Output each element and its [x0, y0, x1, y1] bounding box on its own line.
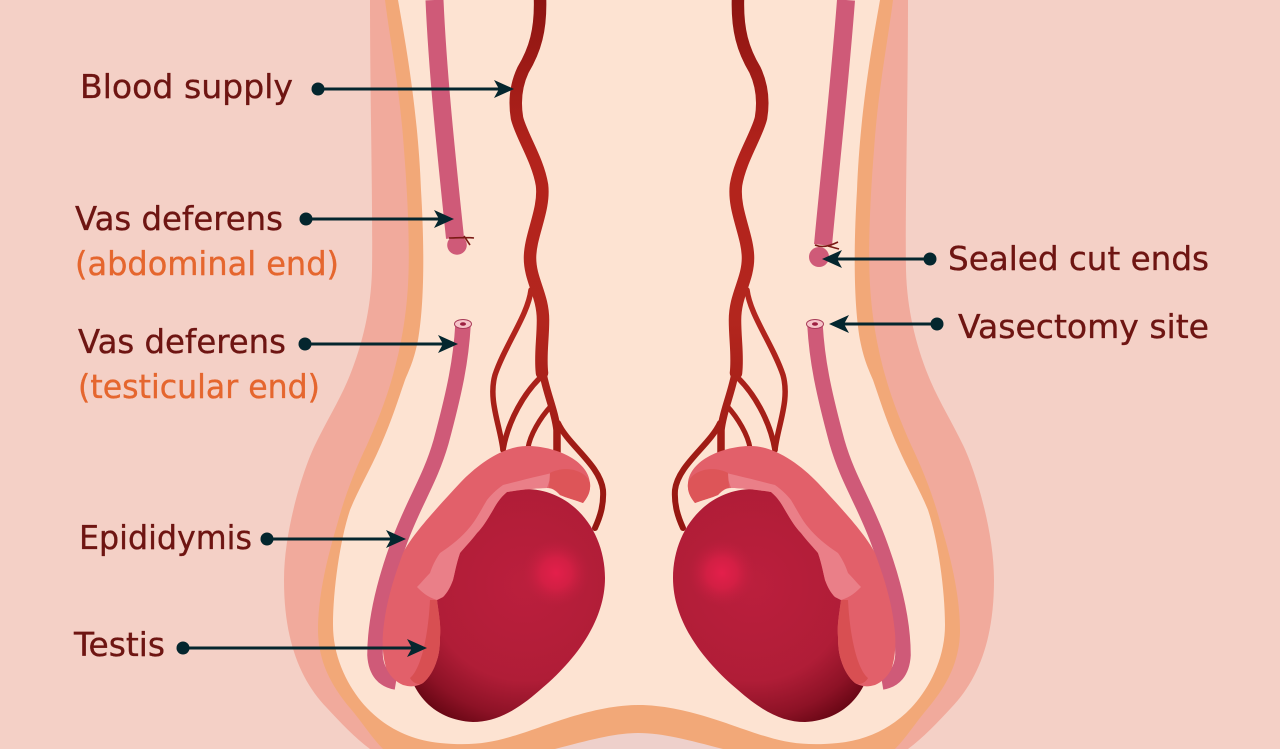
label: vas deferens abdominal end: Vas deferens	[75, 199, 283, 238]
lower vas deferens	[375, 325, 463, 682]
label: vasectomy site	[829, 307, 1209, 346]
label: epididymis: Epididymis	[79, 518, 252, 557]
label: epididymis	[79, 518, 406, 557]
label: blood supply: Blood supply	[80, 67, 293, 106]
testis	[405, 489, 605, 722]
label: vas deferens testicular end: (testicular end)	[78, 367, 320, 406]
label: vas deferens abdominal end: (abdominal end)	[75, 244, 339, 283]
label: testis: Testis	[73, 625, 165, 664]
blood vessels	[493, 0, 603, 528]
label: sealed cut ends: Sealed cut ends	[948, 239, 1209, 278]
body outline layers, left half	[284, 0, 640, 749]
label: sealed cut ends	[822, 239, 1209, 278]
left anatomy	[375, 0, 605, 722]
upper vas deferens, left	[434, 0, 474, 255]
body outline layers, right half	[638, 0, 994, 749]
vas lumen	[454, 320, 472, 328]
label: blood supply	[80, 67, 514, 106]
right anatomy	[673, 0, 903, 722]
label: vas deferens abdominal end	[75, 199, 454, 283]
label: vas deferens testicular end: Vas deferens	[78, 322, 286, 361]
label: testis	[73, 625, 427, 664]
epididymis	[383, 446, 590, 686]
label: vas deferens testicular end	[78, 322, 458, 406]
upper vas deferens, right	[809, 0, 846, 267]
label: vasectomy site: Vasectomy site	[958, 307, 1209, 346]
